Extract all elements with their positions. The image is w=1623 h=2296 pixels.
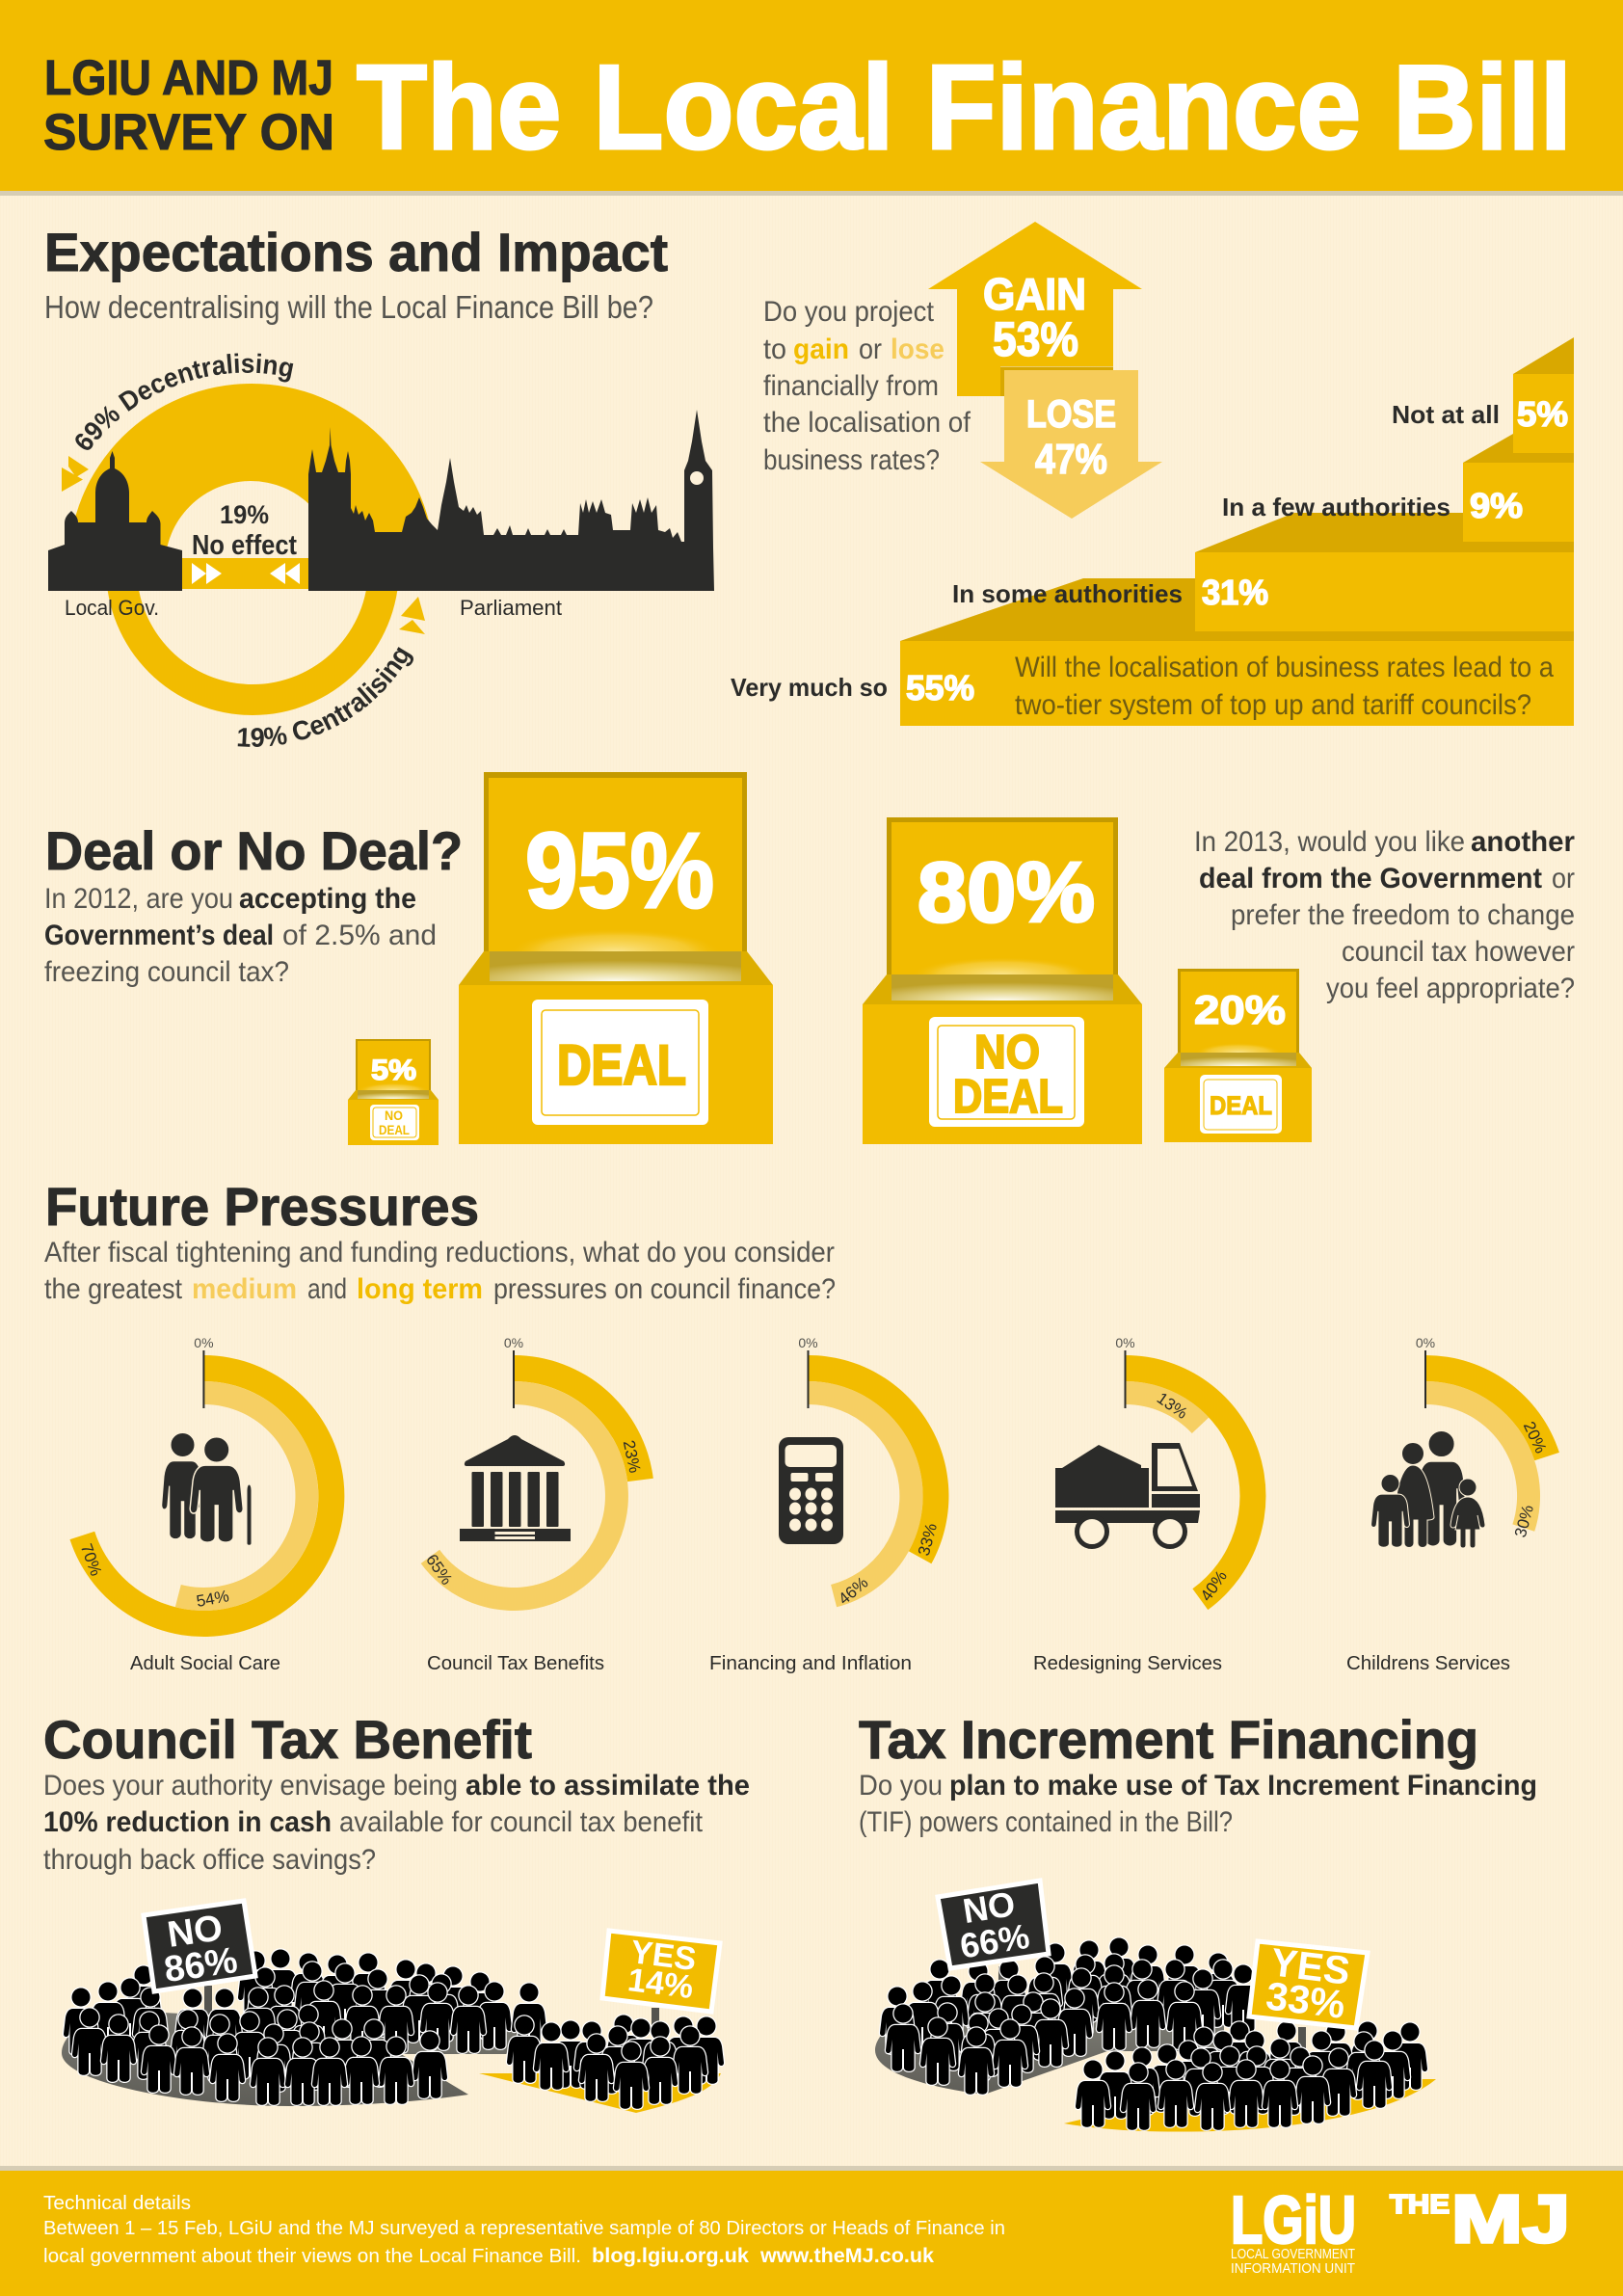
ballot box: 20% deal — [1164, 969, 1312, 1142]
step labels: Very much so — [731, 673, 888, 702]
sign: YES 33%: YES — [1268, 1939, 1352, 1993]
skyline: parliament — [308, 410, 714, 591]
upper arc 69% — [68, 384, 435, 567]
ground pie — [1064, 2079, 1436, 2132]
crowd: TIF NO 66% — [875, 1881, 1261, 2095]
sign: YES 33% — [1249, 1939, 1368, 2028]
logo: LGiU: INFORMATION UNIT — [1231, 2260, 1355, 2277]
question: pressures: medium — [192, 1273, 297, 1305]
chart: decentralising arcs and skyline — [48, 353, 714, 747]
arrow: gain: 53% — [993, 312, 1078, 366]
question: pressures — [44, 1237, 836, 1305]
step labels: 31% — [1202, 573, 1268, 612]
no effect road — [182, 558, 308, 589]
question: 2013 deal: council tax however — [1342, 936, 1575, 968]
footer band — [0, 2166, 1623, 2296]
arrow: lose: LOSE — [1026, 393, 1116, 436]
icon: truck — [1055, 1443, 1200, 1546]
question: pressures: the greatest — [44, 1273, 183, 1305]
donut: adult social care — [69, 1335, 344, 1674]
technical details text: blog.lgiu.org.uk — [592, 2245, 749, 2267]
question: pressures: and — [307, 1273, 347, 1305]
ballot box: 95% deal: DEAL — [557, 1034, 686, 1097]
question: 2013 deal: or — [1552, 863, 1575, 894]
ballot box: 20% deal: 20% — [1194, 987, 1286, 1032]
technical details text: www.theMJ.co.uk — [759, 2245, 934, 2267]
icon: civic building — [460, 1435, 571, 1541]
section heading: Council Tax Benefit: Council Tax Benefit — [43, 1709, 532, 1770]
step labels: 55% — [906, 668, 974, 707]
question: council tax benefit: available for council tax benefit — [339, 1806, 704, 1838]
technical details text: Between 1 – 15 Feb, LGiU and the MJ surveyed a representative sample of 80 Directors or Heads of Finance in — [43, 2218, 1005, 2239]
arrow: lose — [980, 370, 1162, 519]
icon: calculator — [779, 1437, 843, 1544]
crowd: council tax YES 14% — [479, 1931, 724, 2113]
question: 2012 deal — [44, 883, 437, 988]
logo: LGiU: LGiU — [1231, 2182, 1356, 2257]
header band — [0, 0, 1623, 196]
donut: childrens services: 20% — [1520, 1419, 1550, 1456]
road arrows — [192, 563, 300, 584]
section heading: Tax Increment Financing: Tax Increment Financing — [859, 1709, 1478, 1770]
question: tax increment financing: plan to make use of Tax Increment Financing — [949, 1770, 1537, 1802]
logo: The MJ: THE — [1390, 2189, 1450, 2219]
question: decentralising: How decentralising will the Local Finance Bill be? — [44, 289, 653, 325]
donut: adult social care: 54% — [195, 1587, 230, 1611]
step: not at all — [1513, 374, 1574, 453]
logo: The MJ: MJ — [1451, 2181, 1570, 2256]
question: gain or lose: to — [763, 334, 786, 365]
ballot box: 80% no deal: NO — [974, 1027, 1040, 1079]
question: tax increment financing: (TIF) powers contained in the Bill? — [859, 1806, 1233, 1838]
ballot box: 5% no deal — [348, 1039, 439, 1145]
donut: adult social care: 70% — [77, 1541, 105, 1578]
ballot box: 95% deal — [459, 772, 773, 1144]
question: 2013 deal: deal from the Government — [1199, 863, 1542, 894]
question: gain or lose: Do you project — [763, 296, 935, 328]
arrow: right chevrons — [399, 597, 425, 634]
sign: NO 66%: NO — [960, 1883, 1018, 1931]
donut: financing and inflation: Financing and Inflation — [709, 1653, 912, 1674]
step: in a few authorities — [1463, 463, 1574, 542]
question: pressures: pressures on council finance? — [493, 1273, 836, 1305]
question: 2013 deal: In 2013, would you like — [1194, 826, 1465, 858]
header kicker: SURVEY ON — [43, 104, 334, 161]
ballot box: 5% no deal: DEAL — [379, 1122, 410, 1137]
label: 19%: 19% — [220, 500, 269, 529]
question: gain or lose — [763, 296, 971, 476]
question: council tax benefit: able to assimilate the — [466, 1770, 750, 1802]
label: local gov: Local Gov. — [65, 596, 159, 620]
people — [64, 1949, 546, 2105]
arrow: lose: 47% — [1035, 436, 1107, 483]
donut: redesigning services: Redesigning Services — [1033, 1653, 1222, 1674]
donut: childrens services: Childrens Services — [1346, 1653, 1510, 1674]
ballot box: 20% deal: DEAL — [1210, 1091, 1272, 1120]
logo: LGiU: LOCAL GOVERNMENT — [1231, 2246, 1355, 2262]
question: council tax benefit: Does your authority envisage being — [43, 1770, 458, 1802]
sign: NO 66%: 66% — [957, 1916, 1032, 1966]
donut: council tax benefits: Council Tax Benefits — [427, 1653, 604, 1674]
donut: redesigning services: 40% — [1197, 1567, 1231, 1605]
ballot box: 5% no deal: NO — [385, 1108, 403, 1123]
step labels: Not at all — [1392, 400, 1500, 429]
question: two-tier — [1015, 652, 1554, 721]
icon: elderly couple — [162, 1432, 252, 1545]
chart: staircase two-tier system — [731, 337, 1574, 726]
question: council tax benefit: through back office savings? — [43, 1844, 376, 1876]
question: 2013 deal — [1194, 826, 1575, 1004]
donut: redesigning services — [1033, 1335, 1265, 1674]
header kicker — [43, 50, 334, 161]
ballot box: 80% no deal: DEAL — [953, 1071, 1063, 1123]
sign: YES 14%: YES — [628, 1934, 698, 1978]
question: 2012 deal: In 2012, are you — [44, 883, 233, 915]
ballot box: 80% no deal: 80% — [918, 844, 1095, 940]
ballot box: 80% no deal — [863, 817, 1142, 1144]
step labels: 5% — [1517, 394, 1568, 434]
header kicker: LGIU AND MJ — [44, 50, 333, 105]
question: pressures: long term — [357, 1273, 483, 1305]
question: 2013 deal: prefer the freedom to change — [1231, 899, 1575, 931]
donut: financing and inflation: 33% — [915, 1521, 941, 1558]
logo: The MJ — [1390, 2181, 1570, 2256]
question: 2012 deal: freezing council tax? — [44, 956, 289, 988]
sign: YES 14% — [602, 1931, 720, 2012]
donut: childrens services: 30% — [1511, 1503, 1537, 1539]
donut: financing and inflation: 0% — [798, 1335, 818, 1350]
question: 2012 deal: Government’s deal — [44, 920, 274, 951]
donut: council tax benefits: 0% — [504, 1335, 523, 1350]
donut: council tax benefits: 65% — [422, 1551, 456, 1589]
donut: childrens services: 0% — [1416, 1335, 1435, 1350]
donut: financing and inflation — [709, 1335, 948, 1674]
ballot box: 5% no deal: 5% — [371, 1055, 416, 1086]
sign: NO 86%: 86% — [162, 1940, 240, 1990]
lower arc 19% — [106, 569, 399, 715]
ballot box: 95% deal: 95% — [525, 812, 714, 930]
donut: redesigning services: 13% — [1154, 1389, 1191, 1423]
step labels — [731, 394, 1568, 707]
step: in some authorities — [1195, 552, 1574, 631]
curved label: decentralising: 69% Decentralising — [75, 353, 293, 450]
question: gain or lose: gain — [793, 334, 849, 365]
donut: redesigning services: 0% — [1115, 1335, 1135, 1350]
sign: YES 33%: 33% — [1264, 1973, 1347, 2027]
question: 2012 deal: of 2.5% and — [282, 920, 437, 951]
label: parliament: Parliament — [460, 596, 562, 620]
people — [880, 1937, 1261, 2095]
sign pole — [998, 1966, 1006, 2000]
technical details text — [43, 2193, 1005, 2267]
sign pole — [204, 1986, 212, 2015]
donut: council tax benefits: 23% — [620, 1438, 644, 1475]
crowd: council tax NO 86% — [62, 1901, 546, 2106]
question: pressures: After fiscal tightening and funding reductions, what do you consider — [44, 1237, 835, 1268]
donut: financing and inflation: 46% — [835, 1573, 871, 1609]
question: gain or lose: business rates? — [763, 444, 940, 476]
sign: NO 86% — [144, 1901, 255, 1991]
technical details text: local government about their views on the Local Finance Bill. — [43, 2246, 581, 2267]
question: gain or lose: the localisation of — [763, 407, 971, 439]
sign: NO 66% — [938, 1881, 1049, 1968]
question: gain or lose: financially from — [763, 370, 939, 402]
label: no effect: No effect — [192, 530, 297, 561]
logo: LGiU — [1231, 2182, 1356, 2277]
curved label: centralising: 19% Centralising — [237, 647, 413, 747]
ground pie — [62, 2010, 540, 2106]
skyline: local government building — [48, 451, 182, 591]
question: tax increment financing: Do you — [859, 1770, 943, 1802]
question: two-tier: Will the localisation of business rates lead to a — [1015, 652, 1554, 683]
icon: family — [1371, 1430, 1485, 1548]
sign pole — [1298, 2027, 1306, 2052]
question: 2013 deal: another — [1471, 826, 1575, 858]
arrow: gain: GAIN — [983, 269, 1086, 319]
people — [507, 2015, 724, 2109]
question: tax increment financing — [859, 1770, 1537, 1838]
donut: council tax benefits — [421, 1335, 653, 1674]
question: gain or lose: or — [859, 334, 882, 365]
question: gain or lose: lose — [891, 334, 945, 365]
question: two-tier: two-tier system of top up and tariff councils? — [1015, 689, 1531, 721]
section heading: Expectations and Impact: Expectations and Impact — [44, 222, 668, 282]
ground pie — [875, 2019, 1224, 2095]
donut: adult social care: Adult Social Care — [130, 1653, 280, 1674]
arrow: left chevrons — [62, 456, 89, 492]
big ben clock — [690, 471, 704, 485]
sign: NO 86%: NO — [165, 1908, 225, 1956]
people — [1076, 2022, 1427, 2130]
question: council tax benefit: 10% reduction in cash — [43, 1806, 332, 1838]
section heading: Deal or No Deal: Deal or No Deal? — [45, 820, 463, 881]
technical details text: Technical details — [43, 2193, 191, 2214]
step labels: In some authorities — [952, 579, 1183, 608]
donut: childrens services — [1346, 1335, 1559, 1674]
question: 2013 deal: you feel appropriate? — [1326, 973, 1575, 1004]
stair tops — [900, 337, 1574, 641]
arrow: gain — [928, 222, 1142, 396]
question: council tax benefit — [43, 1770, 750, 1876]
step labels: 9% — [1470, 486, 1523, 525]
main title: The Local Finance Bill — [357, 41, 1572, 174]
donut: adult social care: 0% — [194, 1335, 214, 1350]
ground pie — [479, 2073, 721, 2113]
step labels: In a few authorities — [1222, 493, 1450, 521]
question: 2012 deal: accepting the — [239, 883, 416, 915]
crowd: TIF YES 33% — [1064, 1939, 1436, 2132]
sign: YES 14%: 14% — [625, 1962, 695, 2006]
step: very much so — [900, 641, 1574, 726]
sign pole — [652, 2008, 659, 2037]
section heading: Future Pressures: Future Pressures — [45, 1176, 479, 1237]
